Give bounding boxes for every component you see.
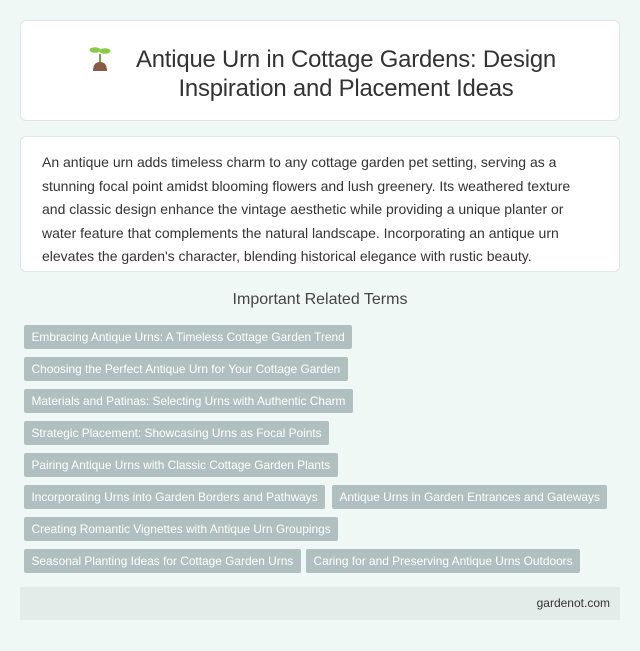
tag 3: Materials and Patinas: Selecting Urns with Authentic Charm [32, 394, 345, 408]
tag 7: Antique Urns in Garden Entrances and Gateways [340, 490, 600, 504]
tag 6 [24, 485, 325, 509]
tag 10 [306, 549, 580, 573]
tag 3 [24, 389, 353, 413]
tag 4 [24, 421, 329, 445]
tag 2: Choosing the Perfect Antique Urn for Your Cottage Garden [32, 362, 340, 376]
tag 10: Caring for and Preserving Antique Urns Outdoors [314, 554, 573, 568]
tag 6: Incorporating Urns into Garden Borders and Pathways [32, 490, 318, 504]
tag 4: Strategic Placement: Showcasing Urns as Focal Points [32, 426, 322, 440]
header card [20, 20, 620, 121]
description text: An antique urn adds timeless charm to any cottage garden pet setting, serving as a stunning focal point amidst blooming flowers and lush greenery. Its weathered texture and classic design enhance the vintage aesthetic while providing a unique planter or water feature that complements the natural landscape. Incorporating an antique urn elevates the garden's character, blending historical elegance with rustic beauty. [42, 154, 570, 264]
section heading: Important Related Terms [233, 291, 407, 308]
footer [20, 587, 620, 620]
tag 5: Pairing Antique Urns with Classic Cottage Garden Plants [32, 458, 330, 472]
description card [20, 136, 620, 272]
tag 1 [24, 325, 352, 349]
tag 9 [24, 549, 301, 573]
title: Antique Urn in Cottage Gardens: Design Inspiration and Placement Ideas [136, 46, 556, 102]
footer text: gardenot.com [537, 596, 610, 610]
tag 8: Creating Romantic Vignettes with Antique Urn Groupings [32, 522, 331, 536]
tag 9: Seasonal Planting Ideas for Cottage Garden Urns [32, 554, 293, 568]
icon: sprout [90, 47, 110, 71]
tag 1: Embracing Antique Urns: A Timeless Cottage Garden Trend [32, 330, 345, 344]
tag 8 [24, 517, 338, 541]
tag 2 [24, 357, 348, 381]
tag 7 [332, 485, 607, 509]
tag 5 [24, 453, 338, 477]
